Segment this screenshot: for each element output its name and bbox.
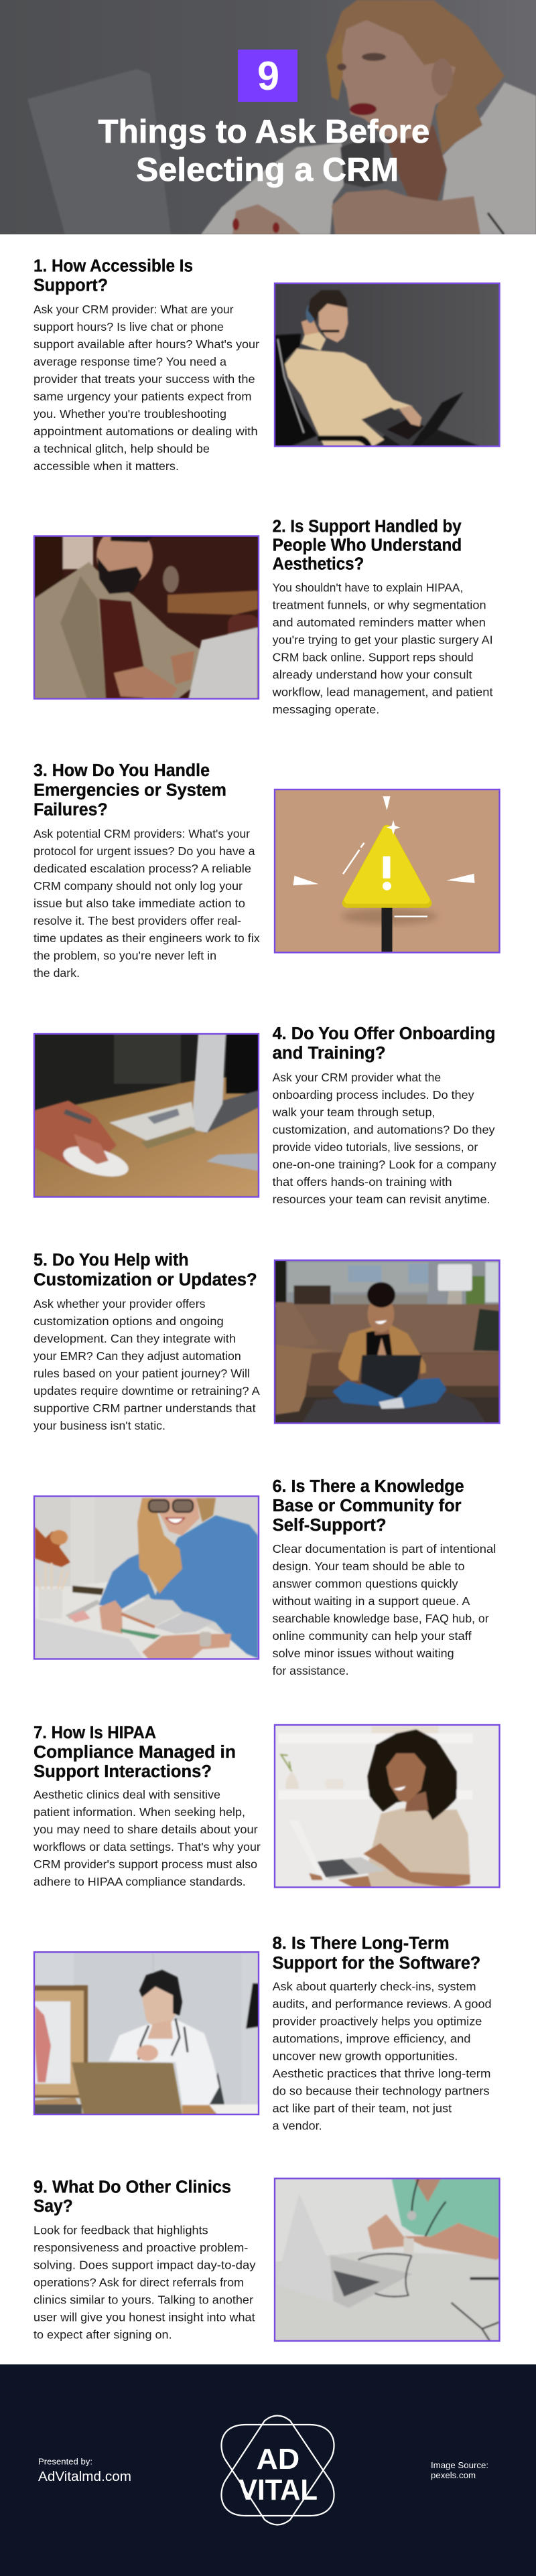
heading: question 3 (34, 761, 226, 820)
text block: question 3: protocol for urgent issues? Do you have a (34, 844, 255, 858)
text block: question 5: your business isn't static. (34, 1419, 165, 1432)
text block: question 2: You shouldn't have to explain HIPAA, (273, 581, 463, 595)
heading: question 3: 3. How Do You Handle (34, 761, 210, 780)
panel: question 6 (34, 1477, 496, 1677)
hero photo: woman with phone at laptop (0, 0, 536, 234)
text block: question 4: provide video tutorials, live sessions, or (273, 1140, 478, 1154)
heading: question 2: 2. Is Support Handled by (273, 517, 462, 536)
heading: question 8: 8. Is There Long-Term (273, 1935, 450, 1953)
text block: question 8: do so because their technology partners (273, 2084, 490, 2097)
text block: question 9: solving. Does support impact day-to-day (34, 2259, 256, 2272)
photo: curly-haired woman with laptop (275, 1725, 500, 1888)
photo: bearded man at laptop (34, 526, 259, 699)
text block: question 1: appointment automations or dealing with (34, 425, 258, 438)
text block: question 3: dedicated escalation process? A reliable (34, 862, 251, 875)
text block: question 2: messaging operate. (273, 703, 379, 716)
image source (431, 2460, 488, 2480)
text block: question 4: Ask your CRM provider what the (273, 1071, 441, 1084)
heading: question 6 (273, 1477, 464, 1535)
presented by: AdVitalmd.com (38, 2470, 131, 2484)
text block: question 8 (273, 1979, 492, 2132)
text block: question 2: CRM back online. Support reps should (273, 651, 474, 664)
title: Things to Ask Before (98, 114, 429, 150)
text block: question 5: rules based on your patient journey? Will (34, 1367, 250, 1380)
text block: question 8: automations, improve efficiency, and (273, 2032, 470, 2045)
heading: question 8: Support for the Software? (273, 1954, 480, 1973)
text block: question 6: online community can help your staff (273, 1629, 472, 1643)
panel: question 1 (34, 257, 500, 473)
text block: question 1: average response time? You need a (34, 355, 226, 368)
text block: question 3: the problem, so you're never left in (34, 949, 216, 962)
text block: question 5 (34, 1297, 260, 1432)
heading: question 3: Emergencies or System (34, 781, 226, 800)
text block: question 9: clinics similar to yours. Talking to another (34, 2293, 253, 2307)
text block: question 1: a technical glitch, help should be (34, 442, 210, 455)
text block: question 8: a vendor. (273, 2119, 322, 2132)
heading: question 2: Aesthetics? (273, 554, 364, 573)
panel: question 5 (34, 1251, 500, 1432)
heading: question 2 (273, 517, 462, 573)
text block: question 4: walk your team through setup, (272, 1106, 436, 1119)
text block: question 3: resolve it. The best providers offer real- (34, 914, 241, 927)
heading: question 7: Support Interactions? (34, 1762, 212, 1781)
text block: question 7 (33, 1788, 261, 1888)
logo: AdVital (221, 2416, 334, 2524)
text block: question 1: Ask your CRM provider: What are your (34, 303, 234, 316)
number badge (238, 50, 297, 102)
text block: question 3: time updates as their engineers work to fix (34, 931, 260, 945)
heading: question 7: Compliance Managed in (34, 1743, 236, 1762)
text block: question 4: resources your team can revisit anytime. (273, 1193, 490, 1206)
text block: question 2 (272, 581, 493, 716)
text block: question 6: design. Your team should be able to (273, 1560, 465, 1573)
text block: question 5: your EMR? Can they adjust automation (34, 1349, 241, 1363)
panel: question 3 (34, 761, 500, 980)
text block: question 1: provider that treats your success with the (34, 372, 255, 386)
heading: question 9: 9. What Do Other Clinics (34, 2178, 231, 2197)
panel: question 8 (34, 1935, 492, 2132)
heading: question 7 (34, 1724, 236, 1781)
text block: question 4: customization, and automations? Do they (273, 1123, 495, 1136)
text block: question 6: answer common questions quickly (273, 1577, 458, 1590)
text block: question 3 (34, 827, 260, 980)
panel: question 2 (34, 517, 493, 716)
photo: hand on mouse at desk (34, 1034, 259, 1197)
text block: question 4 (272, 1071, 496, 1206)
text block: question 3: the dark. (34, 966, 80, 980)
text block: question 5: updates require downtime or retraining? A (34, 1384, 260, 1397)
text block: question 5: customization options and ongoing (34, 1314, 224, 1328)
text block: question 7: adhere to HIPAA compliance standards. (34, 1875, 246, 1888)
heading: question 1: 1. How Accessible Is (34, 257, 193, 276)
text block: question 9: responsiveness and proactive problem- (34, 2241, 249, 2255)
heading: question 3: Failures? (34, 801, 108, 820)
heading: question 1: Support? (34, 276, 108, 295)
text block: question 8: uncover new growth opportunities. (273, 2049, 458, 2062)
text block: question 8: Ask about quarterly check-ins, system (273, 1979, 476, 1993)
text block: question 8: act like part of their team, not just (273, 2101, 452, 2115)
heading: question 2: People Who Understand (273, 536, 462, 555)
text block: question 1: accessible when it matters. (34, 459, 179, 473)
logo: AdVital: VITAL (239, 2474, 318, 2506)
text block: question 6: for assistance. (273, 1664, 349, 1677)
photo: clinician in scrubs with laptop (275, 2178, 500, 2342)
text block: question 4: onboarding process includes. Do they (273, 1088, 474, 1102)
text block: question 4: one-on-one training? Look for a company (273, 1158, 496, 1171)
text block: question 9 (34, 2224, 256, 2342)
photo: woman on floor with laptop (275, 1260, 500, 1424)
heading: question 6: 6. Is There a Knowledge (273, 1477, 464, 1496)
panel: question 7 (33, 1724, 499, 1888)
title: Selecting a CRM (136, 152, 399, 188)
text block: question 5: Ask whether your provider offers (34, 1297, 206, 1310)
text block: question 7: workflows or data settings. That's why your (33, 1840, 261, 1853)
heading: question 1 (34, 257, 193, 295)
text block: question 3: Ask potential CRM providers: What's your (34, 827, 250, 840)
heading: question 9: Say? (34, 2197, 73, 2216)
text block: question 2: workflow, lead management, and patient (272, 686, 493, 699)
heading: question 4: and Training? (273, 1044, 386, 1063)
heading: question 5 (34, 1251, 257, 1290)
logo: AdVital: AD (257, 2443, 299, 2476)
text block: question 3: CRM company should not only log your (34, 879, 243, 893)
text block: question 1: support available after hours? What's your (34, 337, 259, 351)
text block: question 6 (272, 1542, 496, 1677)
heading: question 8 (273, 1935, 480, 1973)
icon: yellow warning sign (275, 789, 500, 953)
text block: question 7: Aesthetic clinics deal with sensitive (34, 1788, 220, 1801)
footer (0, 2364, 536, 2576)
text block: question 6: Clear documentation is part of intentional (273, 1542, 496, 1556)
heading: question 7: 7. How Is HIPAA (34, 1724, 156, 1742)
text block: question 2: and automated reminders matter when (273, 616, 486, 629)
text block: question 9: user will give you honest insight into what (34, 2311, 255, 2324)
heading: question 9 (34, 2178, 231, 2216)
text block: question 2: you're trying to get your plastic surgery AI (273, 633, 493, 647)
text block: question 4: that offers hands-on training with (273, 1175, 452, 1189)
heading: question 4 (273, 1025, 495, 1063)
heading: question 4: 4. Do You Offer Onboarding (273, 1025, 495, 1043)
text block: question 7: patient information. When seeking help, (34, 1805, 245, 1819)
text block: question 9: operations? Ask for direct referrals from (34, 2276, 244, 2289)
text block: question 9: Look for feedback that highlights (34, 2224, 208, 2237)
photo: woman in blue sweater with book (34, 1496, 259, 1659)
text block: question 8: provider proactively helps you optimize (273, 2014, 482, 2028)
text block: question 1: support hours? Is live chat or phone (34, 320, 224, 333)
presented by (38, 2456, 131, 2484)
text block: question 1: same urgency your patients expect from (34, 390, 252, 403)
panel: question 4 (34, 1025, 496, 1206)
heading: question 6: Base or Community for (273, 1497, 462, 1515)
text block: question 5: development. Can they integrate with (34, 1332, 236, 1345)
panel: question 9 (34, 2178, 500, 2342)
text block: question 8: audits, and performance reviews. A good (273, 1997, 492, 2010)
heading: question 5: 5. Do You Help with (34, 1251, 189, 1270)
text block: question 2: already understand how your consult (273, 668, 472, 682)
text block: question 2: treatment funnels, or why segmentation (273, 599, 486, 612)
title (98, 114, 429, 188)
text block: question 7: you may need to share details about your (34, 1823, 258, 1836)
number badge: 9 (257, 54, 279, 98)
text block: question 7: CRM provider's support process must also (34, 1858, 257, 1871)
text block: question 6: solve minor issues without waiting (273, 1647, 454, 1660)
text block: question 6: without waiting in a support queue. A (272, 1594, 470, 1608)
text block: question 9: to expect after signing on. (34, 2328, 172, 2342)
text block: question 1: you. Whether you're troubleshooting (34, 407, 226, 421)
heading: question 6: Self-Support? (273, 1516, 387, 1535)
photo: doctor at laptop (34, 1952, 259, 2115)
hero banner (0, 0, 536, 234)
photo: man with headset and laptop (275, 283, 500, 446)
text block: question 5: supportive CRM partner understands that (34, 1401, 256, 1415)
text block: question 1 (34, 303, 259, 473)
text block: question 6: searchable knowledge base, FAQ hub, or (273, 1612, 489, 1625)
text block: question 8: Aesthetic practices that thrive long-term (273, 2066, 490, 2080)
image source: Image Source: (431, 2460, 488, 2470)
image source: pexels.com (431, 2470, 476, 2480)
text block: question 3: issue but also take immediate action to (34, 897, 245, 910)
presented by: Presented by: (38, 2456, 92, 2466)
heading: question 5: Customization or Updates? (34, 1271, 257, 1290)
